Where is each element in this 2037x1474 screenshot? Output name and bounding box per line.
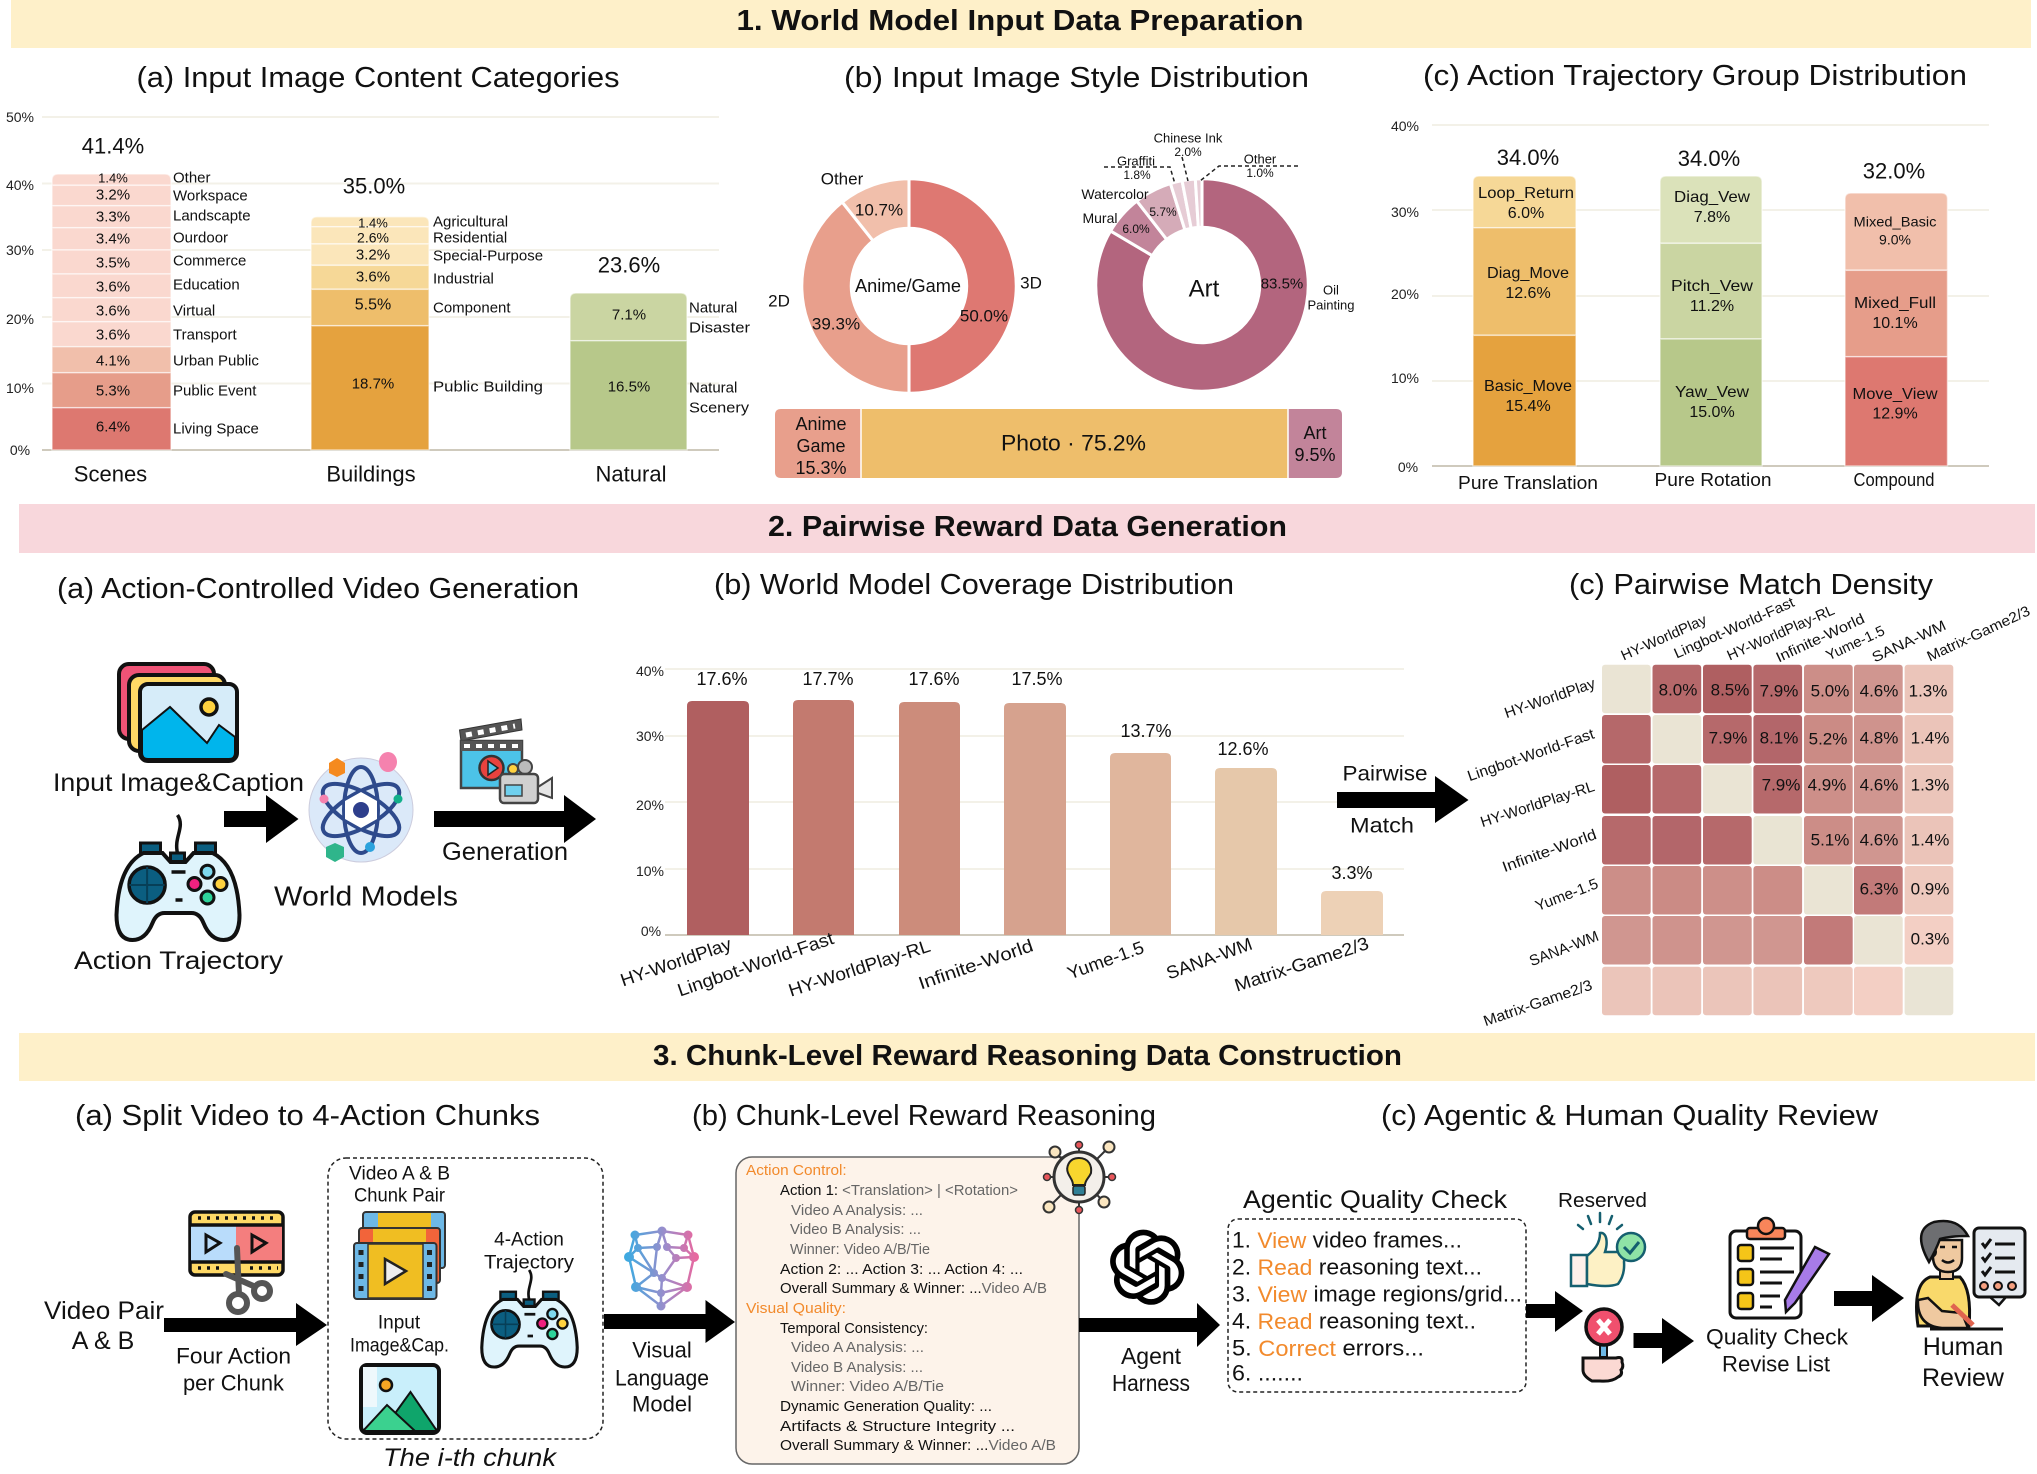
heatmap top labels: Infinite-World xyxy=(1774,611,1867,666)
stacked bar: compound: Mixed_Basic xyxy=(1854,213,1936,229)
label: 4-action trajectory: Trajectory xyxy=(484,1252,575,1274)
y axis labels 1c: 0% xyxy=(1398,459,1418,475)
reasoning card: Dynamic Generation Quality: ... xyxy=(780,1399,992,1415)
bar value labels: 17.6% xyxy=(908,669,960,689)
stacked bar: pure translation: Pure Translation xyxy=(1458,473,1598,493)
stacked bar: pure rotation: Pure Rotation xyxy=(1654,470,1772,490)
heatmap values: 6.3% xyxy=(1860,880,1898,898)
stacked bar: buildings: Industrial xyxy=(433,270,494,288)
stacked bar: buildings: 3.2% xyxy=(356,246,390,264)
y axis labels 1c: 40% xyxy=(1391,118,1419,134)
heading 2b: (b) World Model Coverage Distribution xyxy=(714,569,1234,601)
heatmap values: 5.0% xyxy=(1811,682,1849,700)
heading 3a: (a) Split Video to 4-Action Chunks xyxy=(75,1100,540,1132)
heatmap left labels: Matrix-Game2/3 xyxy=(1481,977,1595,1030)
label: human review: Human xyxy=(1923,1333,2003,1361)
stacked bar: scenes: 3.6% xyxy=(96,326,130,344)
heatmap top labels: Yume-1.5 xyxy=(1824,623,1887,664)
stacked bar: pure translation xyxy=(1458,145,1598,493)
stacked bar: compound: Mixed_Full xyxy=(1854,295,1936,312)
heading 1a: (a) Input Image Content Categories xyxy=(136,62,620,94)
label: input image and caption: Input xyxy=(378,1312,421,1334)
heatmap values: 4.9% xyxy=(1808,776,1846,794)
stacked bar: scenes: 3.4% xyxy=(96,230,130,248)
stacked bar: pure translation: Loop_Return xyxy=(1478,185,1574,202)
label: human review xyxy=(1922,1333,2005,1392)
stacked bar: buildings: 2.6% xyxy=(357,230,389,246)
reasoning card: Video A Analysis: ... xyxy=(791,1340,924,1356)
heatmap top labels: Matrix-Game2/3 xyxy=(1925,603,2033,665)
icon: agent knot logo xyxy=(1111,1230,1184,1304)
stacked bar: pure rotation: 7.8% xyxy=(1694,209,1730,226)
heatmap values xyxy=(1659,680,1949,948)
arrow: to visual language model xyxy=(604,1300,735,1343)
x axis model labels: HY-WorldPlay-RL xyxy=(786,936,933,1001)
y axis labels 1a: 30% xyxy=(6,242,34,258)
bar value labels: 17.6% xyxy=(696,669,748,689)
y axis labels 2b: 30% xyxy=(636,728,664,744)
checklist box: 6. ....... xyxy=(1232,1360,1303,1386)
panel: agentic and human quality review xyxy=(1228,1100,2025,1392)
label: reserved: Reserved xyxy=(1558,1190,1647,1212)
arrow: pairwise match xyxy=(1337,776,1468,823)
heatmap values: 4.8% xyxy=(1860,728,1898,748)
stacked bar: natural: 16.5% xyxy=(608,378,650,396)
stacked bar: scenes: Ourdoor xyxy=(173,230,228,246)
x axis model labels: SANA-WM xyxy=(1164,934,1255,983)
stacked bar: scenes: 4.1% xyxy=(96,352,130,370)
section title 1: 1. World Model Input Data Preparation xyxy=(736,5,1304,37)
donut: art: Graffiti xyxy=(1117,154,1155,168)
heading 2a: (a) Action-Controlled Video Generation xyxy=(57,573,579,605)
y axis labels 2b xyxy=(636,663,664,939)
heatmap left labels: Yume-1.5 xyxy=(1533,875,1601,915)
checklist box: 1. View video frames... xyxy=(1232,1228,1462,1252)
label: input image and caption xyxy=(350,1312,449,1356)
y axis labels 1a: 0% xyxy=(10,442,30,458)
stacked bar: pure rotation: 11.2% xyxy=(1690,298,1734,315)
stacked bar: compound: 9.0% xyxy=(1879,231,1911,247)
stacked bar: compound: Move_View xyxy=(1852,386,1938,403)
label: 4-action trajectory xyxy=(484,1230,575,1274)
heatmap values: 8.5% xyxy=(1711,680,1749,700)
icon: image stack xyxy=(119,664,237,761)
label: quality check revise list: Revise List xyxy=(1722,1352,1830,1376)
icon: clipboard and pencil xyxy=(1730,1218,1829,1318)
stacked bar: buildings: Residential xyxy=(433,230,507,246)
heatmap top labels: HY-WorldPlay-RL xyxy=(1725,603,1837,664)
stacked bar: scenes: Commerce xyxy=(173,252,246,270)
label: visual language model: Visual xyxy=(632,1338,692,1362)
stacked bar: buildings: 18.7% xyxy=(352,376,394,392)
panel: split video to chunks xyxy=(44,1100,735,1472)
x axis model labels xyxy=(618,928,1371,1001)
icon: atom world models xyxy=(309,752,413,862)
reasoning card: Video B Analysis: ... xyxy=(790,1222,921,1238)
heatmap left labels: Lingbot-World-Fast xyxy=(1465,725,1597,785)
stacked bar: style share: Game xyxy=(796,436,846,456)
stacked bar: natural: 7.1% xyxy=(612,306,646,324)
reasoning card: Video B Analysis: ... xyxy=(791,1360,923,1376)
label: the i-th chunk: The i-th chunk xyxy=(383,1444,558,1472)
heatmap values: 8.1% xyxy=(1760,728,1798,748)
stacked bar: buildings: 35.0% xyxy=(343,174,405,198)
heatmap left labels xyxy=(1465,675,1601,1030)
stacked bar: compound: 10.1% xyxy=(1872,315,1918,332)
reasoning card: Winner: Video A/B/Tie xyxy=(791,1379,944,1395)
section title 2: 2. Pairwise Reward Data Generation xyxy=(768,511,1287,543)
stacked bar: style share xyxy=(775,409,1342,478)
x axis model labels: Lingbot-World-Fast xyxy=(675,928,836,1000)
reasoning card: Action Control: xyxy=(746,1163,847,1179)
label: match: Match xyxy=(1350,814,1414,838)
donut: art: 6.0% xyxy=(1122,222,1150,236)
stacked bar: scenes: 3.6% xyxy=(96,278,130,296)
y axis labels 1a: 10% xyxy=(6,380,34,396)
stacked bar: scenes: 6.4% xyxy=(96,418,130,436)
donut: art: 2.0% xyxy=(1174,145,1202,159)
label: agent harness: Agent xyxy=(1121,1343,1182,1369)
stacked bar: natural: Natural xyxy=(689,380,737,396)
stacked bar: scenes: Workspace xyxy=(173,188,248,204)
arrow: agent harness xyxy=(1079,1303,1220,1347)
icon: clapperboard and camera xyxy=(460,719,552,803)
icon: reject sign xyxy=(1583,1309,1623,1381)
stacked bar: pure rotation: Pitch_Vew xyxy=(1671,278,1753,295)
stacked bar: pure translation: 34.0% xyxy=(1497,145,1559,170)
label: four action per chunk: per Chunk xyxy=(183,1370,285,1396)
panel: the i-th chunk xyxy=(328,1158,603,1439)
section title 3: 3. Chunk-Level Reward Reasoning Data Construction xyxy=(653,1040,1402,1072)
panel: action-controlled video generation xyxy=(53,573,596,975)
heatmap values: 5.2% xyxy=(1809,730,1847,748)
stacked bar: scenes: Transport xyxy=(173,326,237,344)
stacked bar: scenes: 3.2% xyxy=(96,186,130,204)
arrow: four action per chunk xyxy=(164,1303,327,1346)
donut: art: Painting xyxy=(1308,298,1354,312)
stacked bar: style share: Art xyxy=(1303,423,1327,443)
label: chunk pair: Video A & B xyxy=(349,1164,450,1184)
label: visual language model: Language xyxy=(615,1366,709,1390)
heatmap left labels: Infinite-World xyxy=(1500,826,1599,876)
heatmap top labels: Lingbot-World-Fast xyxy=(1672,595,1797,662)
reasoning card: Artifacts & Structure Integrity ... xyxy=(780,1419,1015,1435)
stacked bar: scenes: 3.3% xyxy=(96,208,130,226)
stacked bar: style share: 9.5% xyxy=(1294,445,1336,465)
stacked bar: pure translation: 12.6% xyxy=(1505,285,1551,302)
arrow: reject to revise list xyxy=(1634,1318,1694,1364)
icon: small gamepad xyxy=(482,1270,577,1367)
donut: anime/game: 50.0% xyxy=(960,306,1008,326)
y axis labels 1c: 20% xyxy=(1391,286,1419,302)
donut: art: Watercolor xyxy=(1081,186,1149,202)
heading 1c: (c) Action Trajectory Group Distribution xyxy=(1423,60,1967,92)
checklist box: 3. View image regions/grid... xyxy=(1232,1282,1522,1306)
y axis labels 1a: 40% xyxy=(6,177,34,193)
stacked bar: buildings: Special-Purpose xyxy=(433,248,543,264)
x axis model labels: Matrix-Game2/3 xyxy=(1232,933,1371,996)
heatmap values: 4.6% xyxy=(1860,776,1898,794)
donut: art: 1.0% xyxy=(1246,166,1274,180)
y axis labels 2b: 40% xyxy=(636,663,664,679)
label: four action per chunk: Four Action xyxy=(176,1344,291,1368)
label: world models: World Models xyxy=(274,880,458,912)
stacked bar: buildings: Component xyxy=(433,300,511,316)
reasoning card: Action 1: <Translation> | <Rotation> xyxy=(780,1183,1018,1199)
label: chunk pair: Chunk Pair xyxy=(354,1186,446,1206)
stacked bar: compound: 32.0% xyxy=(1863,158,1925,184)
label: a and b: A & B xyxy=(72,1327,134,1355)
heading 3b: (b) Chunk-Level Reward Reasoning xyxy=(692,1100,1156,1132)
stacked bar: scenes: Living Space xyxy=(173,420,259,438)
label: visual language model xyxy=(615,1338,709,1416)
bar value labels: 12.6% xyxy=(1217,739,1269,759)
stacked bar: scenes: 3.5% xyxy=(96,254,130,272)
panel: world model coverage distribution xyxy=(618,569,1468,1001)
heading 3c: (c) Agentic & Human Quality Review xyxy=(1381,1100,1879,1132)
heading 2c: (c) Pairwise Match Density xyxy=(1569,569,1934,601)
arrow: check to outcome xyxy=(1526,1291,1583,1332)
icon: landscape image xyxy=(361,1365,439,1433)
stacked bar: natural: Natural xyxy=(689,300,737,316)
icon: thumbs up reserved xyxy=(1571,1213,1645,1286)
reasoning card: Temporal Consistency: xyxy=(780,1321,928,1337)
stacked bar: pure rotation: 15.0% xyxy=(1689,404,1735,421)
stacked bar: natural xyxy=(570,252,750,486)
bar value labels: 17.5% xyxy=(1011,669,1063,689)
y axis labels 2b: 10% xyxy=(636,863,664,879)
y axis labels 2b: 20% xyxy=(636,797,664,813)
label: agentic quality check: Agentic Quality Check xyxy=(1243,1186,1508,1214)
icon: gamepad xyxy=(116,815,240,940)
stacked bar: natural: Natural xyxy=(596,462,666,486)
stacked bar: pure rotation: Diag_Vew xyxy=(1674,189,1750,206)
heatmap values: 4.6% xyxy=(1860,682,1898,700)
heatmap values: 0.9% xyxy=(1911,880,1949,898)
icon: light bulb network xyxy=(1044,1142,1116,1214)
stacked bar: pure rotation xyxy=(1654,146,1772,490)
heatmap values: 7.9% xyxy=(1709,728,1747,748)
stacked bar: compound xyxy=(1845,158,1948,490)
stacked bar: style share: Anime xyxy=(795,414,847,434)
donut: anime/game: 10.7% xyxy=(855,200,903,220)
stacked bar: compound: Compound xyxy=(1854,470,1934,490)
donut: anime/game: 3D xyxy=(1020,274,1042,292)
label: human review: Review xyxy=(1922,1364,2005,1392)
y axis labels 1a xyxy=(6,109,34,458)
reasoning card: Overall Summary & Winner: ... Video A/B xyxy=(780,1281,1047,1297)
heatmap values: 7.9% xyxy=(1760,682,1798,700)
bar value labels: 3.3% xyxy=(1331,863,1373,883)
x axis model labels: HY-WorldPlay xyxy=(618,934,734,990)
icon: film stack xyxy=(354,1212,445,1299)
reasoning card: Visual Quality: xyxy=(746,1301,846,1317)
heading 1b: (b) Input Image Style Distribution xyxy=(844,62,1309,94)
stacked bar: scenes: 41.4% xyxy=(82,134,144,158)
stacked bar: style share: 15.3% xyxy=(795,458,847,478)
heatmap values: 1.4% xyxy=(1911,830,1949,850)
y axis labels 1c: 10% xyxy=(1391,370,1419,386)
stacked bar: buildings: 1.4% xyxy=(358,216,388,230)
stacked bar: pure rotation: Yaw_Vew xyxy=(1675,384,1749,401)
heatmap values: 8.0% xyxy=(1659,680,1697,700)
label: generation: Generation xyxy=(442,838,568,866)
heatmap cells xyxy=(1602,665,1953,1015)
reasoning card: Video A Analysis: ... xyxy=(791,1203,923,1219)
y axis labels 1c: 30% xyxy=(1391,204,1419,220)
y axis labels 1a: 50% xyxy=(6,109,34,125)
donut: art: Mural xyxy=(1082,210,1118,226)
heatmap left labels: SANA-WM xyxy=(1527,928,1601,970)
y axis labels 2b: 0% xyxy=(641,923,661,939)
heatmap top labels xyxy=(1619,595,2033,666)
panel: input image style distribution xyxy=(768,62,1354,478)
donut: art: Chinese Ink xyxy=(1154,130,1223,146)
checklist box: 2. Read reasoning text... xyxy=(1232,1254,1482,1280)
arrow: revise list to human xyxy=(1834,1275,1904,1322)
stacked bar: pure translation: Diag_Move xyxy=(1487,265,1569,282)
donut: anime/game: Other xyxy=(821,170,864,188)
panel: pairwise match density xyxy=(1465,569,2033,1030)
donut: art: 1.8% xyxy=(1123,168,1151,182)
heatmap top labels: SANA-WM xyxy=(1870,618,1949,666)
bar value labels: 13.7% xyxy=(1120,721,1172,741)
stacked bar: buildings: Buildings xyxy=(326,462,416,486)
stacked bar: natural: Disaster xyxy=(689,320,750,336)
stacked bar: pure rotation: 34.0% xyxy=(1678,146,1740,171)
panel: action trajectory group distribution xyxy=(1391,60,1989,493)
stacked bar: scenes: 3.6% xyxy=(96,302,130,320)
label: action trajectory: Action Trajectory xyxy=(74,947,284,975)
donut: anime/game: 2D xyxy=(768,292,790,310)
stacked bar: scenes: Other xyxy=(173,170,211,186)
stacked bar: buildings: 3.6% xyxy=(356,268,390,286)
stacked bar: scenes: 1.4% xyxy=(98,170,128,186)
arrow: inputs to world models xyxy=(224,795,298,843)
section band 2 xyxy=(19,504,2035,553)
reasoning card: Overall Summary & Winner: ... Video A/B xyxy=(780,1438,1056,1454)
label: chunk pair xyxy=(349,1164,450,1206)
stacked bar: scenes: Landscapte xyxy=(173,208,251,224)
checklist box: 5. Correct errors... xyxy=(1232,1336,1424,1360)
donut: art: 83.5% xyxy=(1261,276,1303,292)
donut: art: Art xyxy=(1189,276,1220,302)
panel: input image content categories xyxy=(6,62,750,486)
stacked bar: pure translation: 15.4% xyxy=(1505,398,1551,415)
label: input image and caption: Image&Cap. xyxy=(350,1336,449,1356)
heatmap values: 4.6% xyxy=(1860,830,1898,850)
heatmap left labels: HY-WorldPlay-RL xyxy=(1478,778,1597,831)
label: pairwise: Pairwise xyxy=(1342,762,1428,786)
heatmap values: 5.1% xyxy=(1811,830,1849,850)
section band 3 xyxy=(19,1033,2035,1081)
label: video pair: Video Pair xyxy=(44,1297,164,1325)
stacked bar: scenes: Virtual xyxy=(173,302,215,320)
label: four action per chunk xyxy=(176,1344,291,1396)
stacked bar: pure translation: 6.0% xyxy=(1508,205,1544,222)
donut: anime/game: Anime/Game xyxy=(855,276,961,296)
bar value labels: 17.7% xyxy=(802,669,854,689)
donut: art: 5.7% xyxy=(1149,205,1177,219)
y axis labels 1a: 20% xyxy=(6,311,34,327)
stacked bar: buildings: 5.5% xyxy=(355,296,391,314)
heatmap top labels: HY-WorldPlay xyxy=(1619,612,1710,664)
stacked bar: scenes: Public Event xyxy=(173,382,257,400)
donut: art xyxy=(1081,130,1354,391)
panel: chunk-level reward reasoning xyxy=(692,1100,1220,1464)
donut: anime/game: 39.3% xyxy=(812,314,860,334)
icon: human reviewer xyxy=(1916,1221,2025,1329)
stacked bar: compound: 12.9% xyxy=(1872,406,1918,422)
x axis model labels: Yume-1.5 xyxy=(1065,937,1147,983)
checklist box xyxy=(1228,1219,1526,1392)
stacked bar: buildings: Agricultural xyxy=(433,214,508,230)
icon: brain network xyxy=(624,1226,699,1310)
label: quality check revise list: Quality Check xyxy=(1706,1324,1849,1350)
reasoning card: Winner: Video A/B/Tie xyxy=(790,1242,930,1258)
label: agent harness: Harness xyxy=(1112,1370,1190,1396)
label: agent harness xyxy=(1112,1343,1190,1396)
stacked bar: natural: Scenery xyxy=(689,400,750,416)
y axis labels 1c xyxy=(1391,118,1419,475)
stacked bar: scenes: Scenes xyxy=(74,462,147,486)
reasoning card xyxy=(736,1157,1079,1464)
x axis model labels: Infinite-World xyxy=(916,935,1036,993)
section band 1 xyxy=(11,0,2031,48)
heatmap values: 0.3% xyxy=(1911,930,1949,948)
heatmap values: 1.3% xyxy=(1909,682,1947,700)
stacked bar: natural: 23.6% xyxy=(598,252,660,278)
reasoning card: Action 2: ... Action 3: ... Action 4: ... xyxy=(780,1262,1023,1278)
stacked bar: scenes: 5.3% xyxy=(96,382,130,400)
label: quality check revise list xyxy=(1706,1324,1849,1376)
stacked bar: buildings xyxy=(311,174,543,486)
label: 4-action trajectory: 4-Action xyxy=(494,1230,564,1250)
stacked bar: pure translation: Basic_Move xyxy=(1484,378,1572,395)
donut: anime/game xyxy=(768,170,1042,393)
heatmap values: 7.9% xyxy=(1762,776,1800,794)
bars: coverage per model xyxy=(687,700,1383,935)
donut: art: Other xyxy=(1244,152,1277,166)
stacked bar: buildings: Public Building xyxy=(433,378,543,396)
heatmap values: 1.3% xyxy=(1911,776,1949,794)
stacked bar: scenes: Urban Public xyxy=(173,352,259,370)
arrow: generation xyxy=(434,795,596,843)
icon: film with scissors xyxy=(190,1212,283,1312)
donut: art: Oil xyxy=(1323,282,1339,298)
stacked bar: scenes: Education xyxy=(173,276,240,294)
heatmap left labels: HY-WorldPlay xyxy=(1502,675,1598,722)
stacked bar: scenes xyxy=(52,134,259,486)
label: visual language model: Model xyxy=(632,1392,692,1416)
checklist box: 4. Read reasoning text.. xyxy=(1232,1308,1476,1334)
heatmap values: 1.4% xyxy=(1911,728,1949,748)
bar value labels xyxy=(696,669,1373,883)
stacked bar: style share: Photo · 75.2% xyxy=(1001,430,1146,456)
label: input image and caption: Input Image&Caption xyxy=(53,769,304,797)
